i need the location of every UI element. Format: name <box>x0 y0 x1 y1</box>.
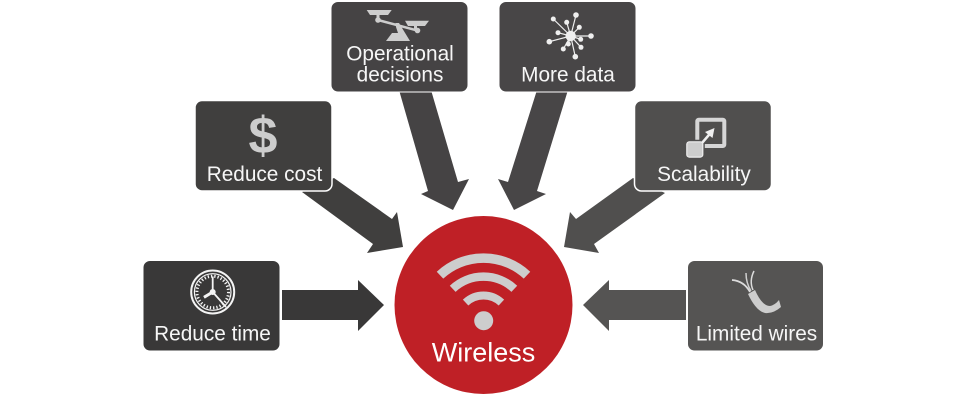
panel: more data <box>499 2 636 92</box>
icon: wires <box>732 271 781 313</box>
icon: data burst <box>546 12 594 59</box>
arrow: reduce time to wireless <box>282 280 384 331</box>
arrow: operational decisions to wireless <box>399 90 469 210</box>
icon: wifi signal <box>440 258 527 330</box>
arrow: scalability to wireless <box>564 178 665 253</box>
icon: dollar sign: $ <box>249 107 278 165</box>
label: reduce cost: Reduce cost <box>207 163 323 186</box>
label: more data: More data <box>521 64 615 86</box>
panel: reduce time <box>143 260 280 351</box>
icon: scaling squares <box>685 120 724 159</box>
label: decisions: decisions <box>357 64 443 86</box>
panel: scalability <box>634 100 772 191</box>
panel: limited wires <box>688 260 824 351</box>
label: wireless: Wireless <box>432 338 535 368</box>
panel: operational decisions <box>331 2 468 92</box>
icon: balance scale <box>367 10 429 41</box>
label: scalability: Scalability <box>657 163 751 186</box>
panel: reduce cost <box>195 100 332 191</box>
label: limited wires: Limited wires <box>696 322 817 346</box>
label: operational: Operational <box>346 42 454 66</box>
arrow: more data to wireless <box>498 90 568 210</box>
arrow: limited wires to wireless <box>583 280 686 331</box>
arrow: reduce cost to wireless <box>302 178 403 253</box>
panel: wireless hub <box>394 216 572 394</box>
icon: clock <box>191 270 234 314</box>
label: reduce time: Reduce time <box>154 322 271 346</box>
